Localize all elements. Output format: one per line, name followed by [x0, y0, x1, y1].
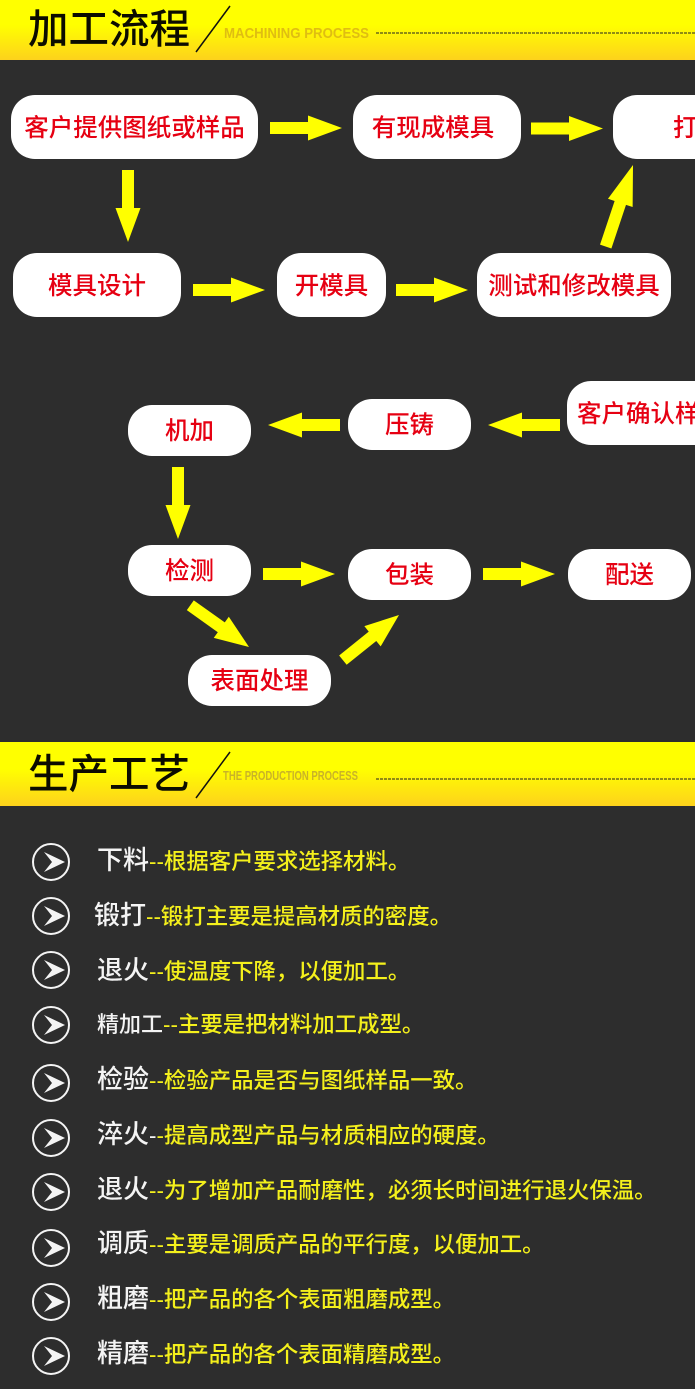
flow node: mould design	[13, 253, 181, 317]
flow node: machining: 机加	[165, 418, 214, 445]
flow node: surface treatment: 表面处理	[210, 668, 308, 695]
flow node: test and modify mould	[477, 253, 671, 317]
step: blanking: 下料--根据客户要求选择材料。	[97, 845, 410, 875]
flow node: delivery	[568, 549, 691, 600]
heading: production process: 生产工艺	[28, 751, 190, 797]
arrow: test up to sample	[593, 161, 645, 251]
step: annealing: 退火--使温度下降，以便加工。	[97, 955, 410, 985]
header band: machining process	[0, 0, 695, 60]
flow node: mould design: 模具设计	[48, 272, 146, 300]
arrow: open mould to test	[396, 278, 468, 302]
flow node: surface treatment	[188, 655, 331, 706]
flow node: inspection	[128, 545, 251, 596]
flow node: open mould: 开模具	[295, 272, 368, 300]
arrow: design to open mould	[193, 278, 265, 302]
flow node: die casting	[348, 399, 471, 450]
icon: chevron circle 5	[33, 1065, 69, 1101]
icon: chevron circle 6	[33, 1120, 69, 1156]
subtitle group: production process: THE PRODUCTION PROCESS	[223, 769, 358, 783]
step: inspection: 检验--检验产品是否与图纸样品一致。	[97, 1064, 477, 1094]
step: forging: 锻打--锻打主要是提高材质的密度。	[94, 900, 452, 930]
arrow: surface treatment to packaging	[335, 605, 407, 670]
arrow: drawings down to design	[116, 170, 140, 242]
step: fine grinding: 精磨--把产品的各个表面精磨成型。	[97, 1338, 455, 1368]
arrow: inspection to surface treatment	[183, 595, 257, 658]
step: finishing: 精加工--主要是把材料加工成型。	[97, 1012, 424, 1037]
arrow: drawings to existing mould	[270, 116, 342, 140]
heading: machining process: 加工流程	[28, 6, 190, 52]
flow node: delivery: 配送	[605, 562, 654, 589]
flow node: test and modify mould: 测试和修改模具	[488, 272, 660, 300]
flow node: customer supplies drawings: 客户提供图纸或样品	[24, 114, 245, 142]
subtitle group: machining process: MACHINING PROCESS	[224, 26, 369, 42]
icon: chevron circle 1	[33, 844, 69, 880]
arrow: inspection to packaging	[263, 562, 335, 586]
flow node: packaging	[348, 549, 471, 600]
flow node: sample making	[613, 95, 695, 159]
icon: chevron circle 9	[33, 1284, 69, 1320]
step: quenching: 淬火--提高成型产品与材质相应的硬度。	[97, 1119, 500, 1149]
arrow: machining to inspection	[166, 467, 190, 539]
flow node: customer confirms sample	[567, 381, 695, 445]
icon: chevron circle 10	[33, 1338, 69, 1374]
flow node: open mould	[277, 253, 386, 317]
icon: chevron circle 7	[33, 1174, 69, 1210]
subtitle group: machining process	[196, 6, 695, 52]
arrow: existing mould to sample	[531, 116, 603, 141]
flow node: machining	[128, 405, 251, 456]
icon: chevron circle 3	[33, 952, 69, 988]
step: rough grinding: 粗磨--把产品的各个表面粗磨成型。	[97, 1283, 455, 1313]
flow node: packaging: 包装	[385, 562, 434, 589]
arrow: die casting to machining	[268, 412, 340, 438]
header band: production process	[0, 742, 695, 806]
arrow: confirm to die casting	[488, 412, 560, 438]
step: annealing again: 退火--为了增加产品耐磨性，必须长时间进行退火保温。	[97, 1174, 657, 1204]
flow node: existing mould	[353, 95, 521, 159]
flow node: customer supplies drawings	[11, 95, 258, 159]
flow node: existing mould: 有现成模具	[372, 114, 494, 142]
icon: chevron circle 2	[33, 898, 69, 934]
flow node: inspection: 检测	[165, 558, 214, 585]
icon: chevron circle 8	[33, 1230, 69, 1266]
icon: chevron circle 4	[33, 1007, 69, 1043]
subtitle group: production process	[196, 752, 695, 798]
step: tempering: 调质--主要是调质产品的平行度，以便加工。	[97, 1228, 545, 1258]
arrow: packaging to delivery	[483, 562, 555, 586]
flow node: die casting: 压铸	[385, 412, 434, 439]
